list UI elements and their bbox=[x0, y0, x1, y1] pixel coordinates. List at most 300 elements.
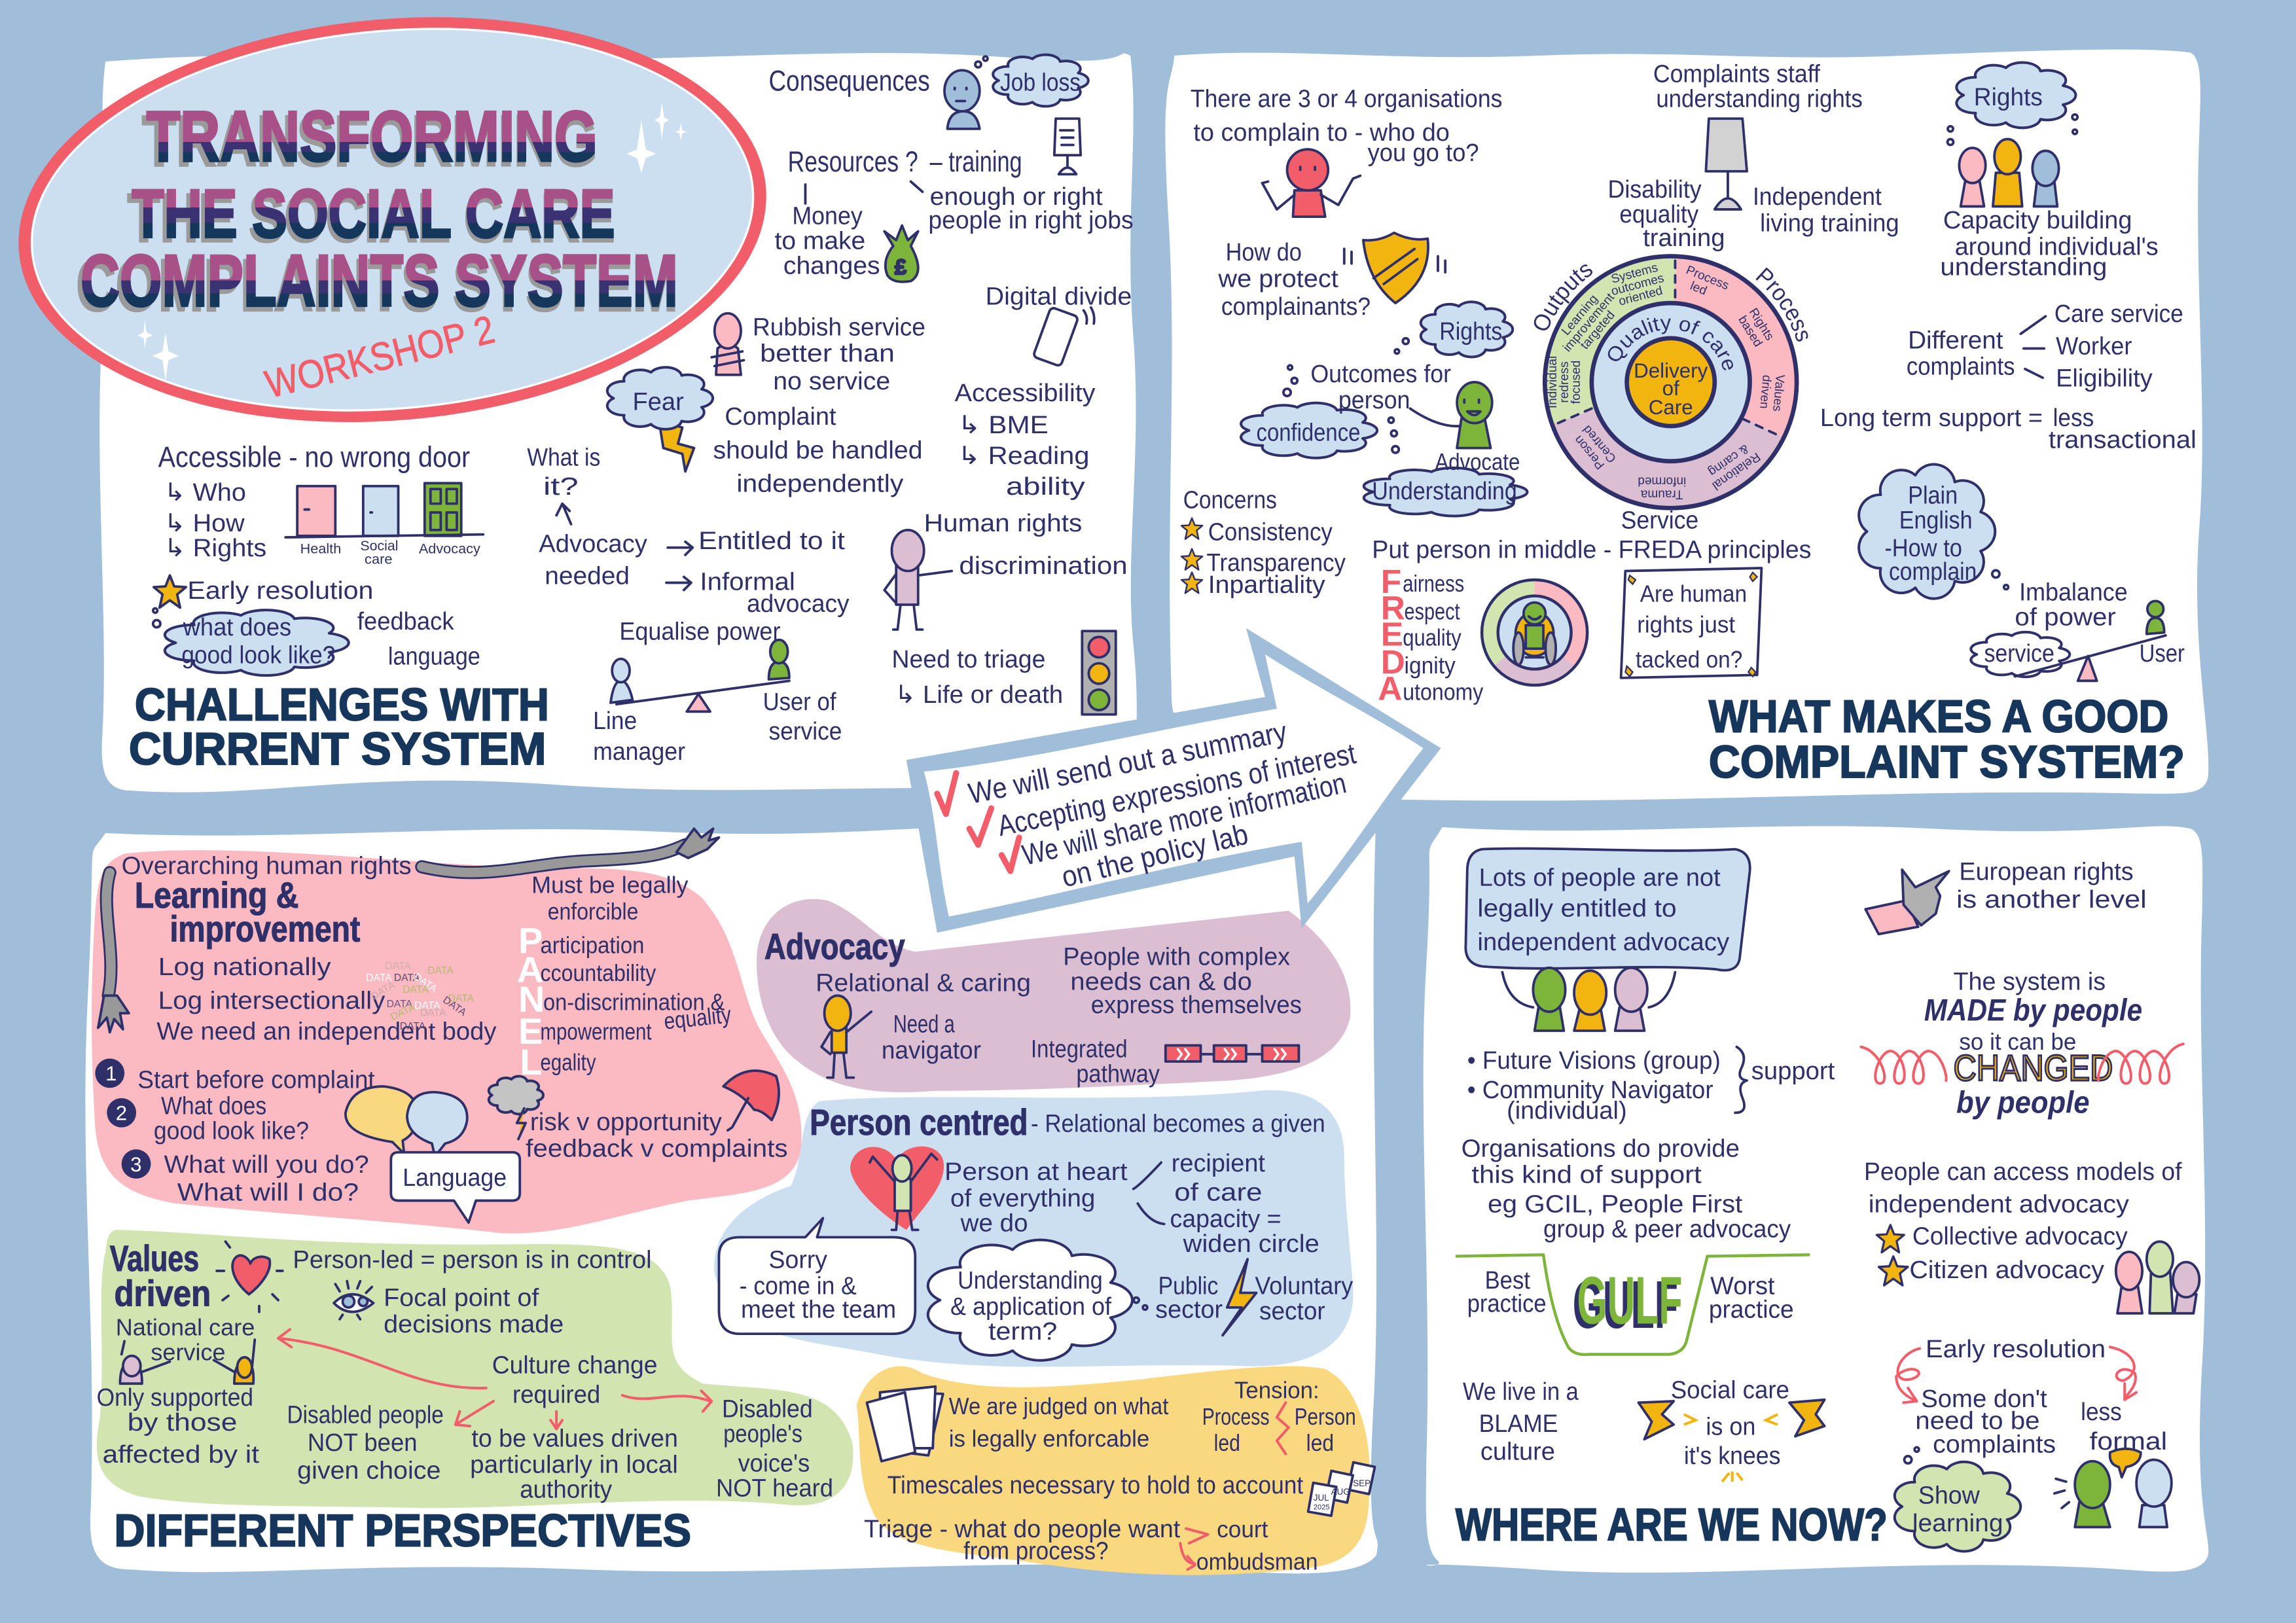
thought cloud: job loss: Job loss bbox=[1000, 69, 1081, 97]
blob: learning and improvement (pink): Overarching human rights bbox=[122, 853, 412, 880]
fear cloud with lightning bbox=[607, 367, 713, 471]
panel: what makes a good complaint system bbox=[1165, 50, 2208, 800]
blob: values driven (green): Disabled bbox=[722, 1396, 813, 1423]
icon: phone bbox=[1033, 307, 1094, 366]
icon: navigator person bbox=[821, 995, 871, 1078]
blob: values driven (green): service bbox=[151, 1339, 226, 1365]
gulf diagram bbox=[1456, 1255, 1810, 1355]
accessible no wrong door: ↳ Rights bbox=[164, 535, 266, 562]
note: are human rights just tacked on: Are human bbox=[1640, 581, 1747, 607]
blob: legally enforceable (yellow): led bbox=[1306, 1430, 1334, 1456]
blob: advocacy (purple) bbox=[757, 899, 1350, 1092]
heading: challenges bbox=[129, 679, 549, 774]
blob: person centred (blue): Person at heart bbox=[944, 1158, 1128, 1186]
advocacy needed flow bbox=[527, 444, 850, 618]
quality of care wheel: Centred bbox=[1580, 422, 1619, 465]
blob: values driven (green): affected by it bbox=[103, 1441, 259, 1469]
early resolution bbox=[153, 575, 480, 675]
cloud: confidence: confidence bbox=[1257, 419, 1360, 446]
blob: legally enforceable (yellow): ombudsman bbox=[1196, 1548, 1318, 1575]
PANEL principles: A bbox=[517, 949, 543, 990]
blob: advocacy (purple): People with complex bbox=[1063, 943, 1290, 971]
resources block bbox=[775, 145, 1134, 279]
blob: learning and improvement (pink): Must be legally bbox=[531, 872, 689, 899]
support list: Organisations do provide bbox=[1462, 1135, 1740, 1162]
complaints staff and lamp: Complaints staff bbox=[1653, 60, 1820, 88]
cloud: plain english: English bbox=[1899, 507, 1973, 535]
speech bubble: sorry bbox=[719, 1218, 915, 1334]
early resolution loop: less bbox=[2081, 1399, 2122, 1426]
concerns list: Concerns bbox=[1183, 486, 1277, 514]
speech bubble: sorry: meet the team bbox=[741, 1296, 896, 1324]
quality of care wheel: outcomes bbox=[1610, 272, 1666, 298]
icon: lamp bbox=[1706, 118, 1747, 209]
capacity building group: around individual's bbox=[1955, 233, 2159, 260]
cloud: understanding bbox=[1364, 468, 1527, 516]
quality of care wheel: Systems bbox=[1610, 261, 1659, 287]
numbered questions: What will I do? bbox=[177, 1179, 359, 1207]
blob: person centred (blue): - Relational becomes a given bbox=[1031, 1110, 1325, 1137]
icon: two small people bbox=[120, 1340, 255, 1383]
icon: talking people bbox=[2054, 1449, 2172, 1527]
icon: advocate person bbox=[1410, 382, 1492, 448]
FREDA principles: utonomy bbox=[1403, 679, 1483, 705]
icon: calendar pages bbox=[1308, 1462, 1375, 1516]
quality of care wheel: oriented bbox=[1617, 284, 1664, 309]
quality of care wheel: Relational bbox=[1710, 450, 1763, 492]
equalise power see-saw: Equalise power bbox=[619, 618, 781, 646]
cloud: show learning bbox=[1895, 1462, 2020, 1552]
support list: support bbox=[1751, 1058, 1835, 1085]
public and voluntary sector: sector bbox=[1259, 1298, 1325, 1325]
PANEL principles: egality bbox=[541, 1049, 596, 1075]
red arrows from culture change bbox=[278, 1329, 711, 1429]
blob: values driven (green): Disabled people bbox=[287, 1402, 444, 1429]
cloud: plain english: complain bbox=[1889, 558, 1977, 586]
different complaints: Care service bbox=[2054, 300, 2183, 328]
icon: calendar pages: JUL bbox=[1314, 1493, 1329, 1503]
cloud: understanding and application of term: term? bbox=[988, 1318, 1057, 1346]
models of advocacy bbox=[1864, 1158, 2199, 1313]
cloud: what does good look like: good look like? bbox=[181, 641, 335, 669]
PANEL principles: on-discrimination & bbox=[543, 990, 725, 1016]
PANEL principles: N bbox=[518, 978, 545, 1020]
fear cloud with lightning: Fear bbox=[632, 388, 684, 416]
advocacy needed flow: it? bbox=[543, 473, 579, 501]
cloud: plain english: Plain bbox=[1908, 482, 1958, 510]
support list: • Community Navigator bbox=[1467, 1077, 1713, 1104]
data word cloud: DATA bbox=[414, 1000, 440, 1011]
social care on its knees: Social care bbox=[1671, 1377, 1789, 1404]
protect complainants: How do bbox=[1226, 239, 1302, 266]
blob: person centred (blue): widen circle bbox=[1183, 1230, 1319, 1258]
traffic light triage: ↳ Life or death bbox=[895, 681, 1063, 709]
quality of care wheel: Trauma bbox=[1640, 487, 1683, 501]
accessible no wrong door: ↳ Who bbox=[164, 479, 246, 507]
gulf diagram: practice bbox=[1467, 1291, 1547, 1318]
rubbish service: better than bbox=[760, 340, 895, 368]
thought cloud: job loss bbox=[975, 55, 1088, 107]
support list bbox=[1462, 1047, 1835, 1243]
imbalance of power see-saw: Imbalance bbox=[2019, 579, 2128, 606]
early resolution loop bbox=[1895, 1336, 2172, 1552]
protect complainants: we protect bbox=[1217, 266, 1338, 293]
main title: COMPLAINTS SYSTEM bbox=[81, 240, 678, 322]
cloud: understanding and application of term: & application of bbox=[950, 1293, 1111, 1321]
quality of care wheel: Delivery bbox=[1634, 359, 1708, 382]
cloud: what does good look like bbox=[153, 609, 349, 675]
numbered questions: 3 bbox=[130, 1153, 142, 1176]
blob: advocacy (purple): Need a bbox=[893, 1010, 955, 1038]
data word cloud: DATA bbox=[420, 1008, 446, 1019]
risk and feedback with storm and umbrella: risk v opportunity bbox=[530, 1109, 722, 1136]
resources block: Resources ? bbox=[788, 145, 918, 178]
different complaints: complaints bbox=[1907, 353, 2015, 381]
blob: learning and improvement (pink): Log nationally bbox=[158, 954, 331, 981]
made by people: CHANGED bbox=[1953, 1047, 2113, 1088]
public and voluntary sector: sector bbox=[1155, 1296, 1223, 1324]
FREDA principles: espect bbox=[1405, 598, 1460, 624]
imbalance of power see-saw: of power bbox=[2015, 603, 2116, 631]
FREDA principles: D bbox=[1381, 643, 1405, 681]
quality of care wheel: Individual bbox=[1546, 356, 1560, 408]
blob: values driven (green): Values bbox=[110, 1238, 199, 1279]
icon: cross-armed person bbox=[711, 313, 744, 375]
quality of care wheel: Outputs bbox=[1534, 264, 1592, 330]
blob: person centred (blue) bbox=[714, 1090, 1353, 1367]
outcomes for person: person bbox=[1338, 387, 1410, 414]
language speech bubble: Language bbox=[403, 1164, 507, 1192]
panel: where are we now bbox=[1424, 826, 2208, 1573]
quality of care wheel: Process bbox=[1684, 263, 1731, 293]
quality of care wheel: Quality of care bbox=[1607, 318, 1733, 370]
icon: pointing hand bbox=[1865, 870, 1949, 934]
imbalance of power see-saw: User bbox=[2140, 640, 2185, 668]
blob: values driven (green): NOT heard bbox=[716, 1474, 833, 1502]
cloud: plain english bbox=[1859, 465, 2008, 599]
heading: what makes a good complaint system bbox=[1709, 691, 2185, 787]
numbered questions bbox=[95, 1059, 375, 1207]
workshop label: WORKSHOP 2 bbox=[260, 307, 499, 406]
blob: values driven (green): voice's bbox=[738, 1450, 810, 1477]
organisations question: There are 3 or 4 organisations bbox=[1191, 85, 1502, 113]
complaints staff and lamp: understanding rights bbox=[1656, 85, 1863, 113]
FREDA principles: F bbox=[1381, 562, 1401, 600]
numbered questions: 2 bbox=[116, 1101, 127, 1124]
icon: calendar pages: 2025 bbox=[1314, 1504, 1330, 1512]
quality of care wheel: Service bbox=[1621, 507, 1698, 535]
quality of care wheel: Values bbox=[1770, 374, 1787, 412]
blob: learning and improvement (pink): Learning & bbox=[135, 874, 298, 916]
blob: advocacy (purple): navigator bbox=[882, 1037, 981, 1065]
icon: calendar pages: AUG bbox=[1331, 1487, 1350, 1497]
gulf diagram: practice bbox=[1709, 1296, 1794, 1324]
blob: advocacy (purple): express themselves bbox=[1091, 991, 1302, 1019]
protect complainants bbox=[1217, 233, 1445, 321]
icon: three doors bbox=[285, 483, 483, 537]
icon: shrugging person bbox=[1263, 149, 1360, 217]
resources block: people in right jobs bbox=[928, 207, 1134, 234]
early resolution loop: formal bbox=[2090, 1428, 2167, 1455]
blame culture: culture bbox=[1480, 1438, 1555, 1466]
blob: values driven (green): Culture change bbox=[492, 1352, 658, 1380]
heading: what makes a good complaint system: COMPLAINT SYSTEM? bbox=[1709, 736, 2185, 787]
PANEL principles: equality bbox=[662, 1001, 732, 1035]
blob: advocacy (purple): Advocacy bbox=[764, 925, 905, 967]
data word cloud: DATA bbox=[403, 984, 429, 995]
title ellipse bbox=[1, 0, 783, 452]
human rights person bbox=[884, 510, 1128, 630]
rubbish service: Rubbish service bbox=[753, 313, 925, 341]
accessible no wrong door: Social bbox=[360, 538, 399, 554]
icon: grey arms bbox=[98, 829, 719, 1032]
cloud: understanding and application of term: Understanding bbox=[958, 1267, 1103, 1294]
blob: person centred (blue): of care bbox=[1174, 1179, 1263, 1207]
gulf diagram: GULF bbox=[1577, 1262, 1683, 1338]
blob: advocacy (purple): Integrated bbox=[1031, 1035, 1128, 1063]
social care on its knees: is on bbox=[1706, 1414, 1755, 1441]
blob: person centred (blue): capacity = bbox=[1170, 1205, 1282, 1233]
long term support: less bbox=[2053, 404, 2094, 432]
resources block: changes bbox=[783, 252, 880, 279]
gulf diagram: Best bbox=[1485, 1267, 1530, 1294]
cloud: understanding and application of term bbox=[928, 1240, 1147, 1361]
blob: values driven (green): authority bbox=[520, 1476, 612, 1504]
digital divide bbox=[986, 283, 1132, 366]
accessible no wrong door: Advocacy bbox=[419, 541, 480, 557]
arrow callout: next steps: on the policy lab bbox=[1058, 817, 1251, 894]
human rights person: Human rights bbox=[924, 510, 1082, 537]
made by people bbox=[1861, 968, 2183, 1119]
early resolution loop: complaints bbox=[1933, 1431, 2056, 1458]
social care on its knees: it's knees bbox=[1684, 1442, 1780, 1470]
data word cloud: DATA bbox=[385, 961, 411, 972]
quality of care wheel: Person bbox=[1571, 433, 1607, 472]
blob: learning and improvement (pink): enforcible bbox=[548, 899, 638, 925]
main title: TRANSFORMING bbox=[147, 97, 598, 177]
numbered questions: What will you do? bbox=[164, 1151, 369, 1179]
blame culture: BLAME bbox=[1479, 1410, 1558, 1438]
blob: values driven (green): Only supported bbox=[97, 1384, 253, 1412]
equalise power see-saw: manager bbox=[593, 738, 685, 766]
outcomes for person: Advocate bbox=[1435, 449, 1520, 475]
sparkles bbox=[137, 103, 687, 381]
main title: THE SOCIAL CARE bbox=[128, 180, 615, 257]
data word cloud: DATA bbox=[412, 971, 439, 995]
blob: values driven (green): National care bbox=[116, 1314, 255, 1340]
outcomes for person bbox=[1241, 302, 1527, 516]
blob: legally enforceable (yellow): from process? bbox=[963, 1538, 1109, 1565]
blob: legally enforceable (yellow): led bbox=[1214, 1430, 1240, 1456]
lots of people box bbox=[1465, 849, 1750, 1031]
concerns list: Transparency bbox=[1206, 550, 1346, 577]
data word cloud: DATA bbox=[440, 995, 469, 1018]
blob: person centred (blue): of everything bbox=[950, 1185, 1095, 1212]
lots of people box: Lots of people are not bbox=[1479, 865, 1721, 892]
numbered questions: good look like? bbox=[154, 1118, 309, 1145]
blob: learning and improvement (pink): Log intersectionally bbox=[158, 987, 385, 1014]
blob: advocacy (purple): Relational & caring bbox=[816, 970, 1031, 997]
icon: heart bbox=[217, 1241, 283, 1312]
concerns list bbox=[1181, 486, 1346, 599]
resources block: to make bbox=[775, 227, 865, 255]
concerns list: Inpartiality bbox=[1208, 571, 1325, 599]
quality of care wheel: focused bbox=[1570, 361, 1583, 404]
quality of care wheel bbox=[1534, 254, 1808, 535]
complaint handling: Complaint bbox=[725, 403, 836, 431]
heading: what makes a good complaint system: WHAT MAKES A GOOD bbox=[1709, 691, 2168, 742]
cloud: rights: Rights bbox=[1439, 318, 1502, 346]
note: are human rights just tacked on bbox=[1621, 568, 1761, 678]
consequences block bbox=[769, 55, 1088, 129]
blob: values driven (green): decisions made bbox=[384, 1311, 564, 1338]
icon: person at heart bbox=[850, 1147, 944, 1230]
complaints staff and lamp bbox=[1607, 60, 1899, 252]
quality of care wheel: Rights bbox=[1746, 306, 1776, 343]
data word cloud: DATA bbox=[387, 999, 413, 1010]
numbered questions: Start before complaint bbox=[137, 1066, 375, 1094]
cloud: show learning: learning bbox=[1912, 1510, 2003, 1537]
consequences block: Consequences bbox=[769, 65, 930, 98]
accessibility: Accessibility bbox=[955, 380, 1095, 407]
blob: values driven (green): Person-led = person is in control bbox=[293, 1246, 652, 1274]
advocacy needed flow: needed bbox=[545, 563, 630, 590]
accessible no wrong door: Health bbox=[300, 541, 341, 557]
accessibility: ability bbox=[1006, 473, 1085, 501]
note: are human rights just tacked on: rights just bbox=[1637, 611, 1735, 637]
cloud: show learning: Show bbox=[1918, 1482, 1980, 1510]
panel: different perspectives bbox=[85, 804, 1378, 1573]
cloud: confidence bbox=[1241, 403, 1377, 458]
advocacy needed flow: Entitled to it bbox=[698, 527, 845, 555]
main title bbox=[76, 97, 678, 326]
support list: group & peer advocacy bbox=[1543, 1215, 1791, 1243]
FREDA principles: R bbox=[1381, 588, 1405, 626]
quality of care wheel: of bbox=[1662, 377, 1679, 400]
data word cloud: DATA bbox=[394, 972, 420, 984]
different complaints: Eligibility bbox=[2056, 365, 2153, 393]
icon: worried person bbox=[944, 70, 980, 129]
data word cloud: DATA bbox=[400, 1021, 426, 1032]
PANEL principles: P bbox=[518, 919, 543, 961]
icon: stack of paper bbox=[867, 1387, 943, 1461]
icon: money bag: £ bbox=[895, 255, 906, 278]
made by people: MADE by people bbox=[1924, 992, 2142, 1027]
rubbish service: no service bbox=[773, 368, 890, 395]
quality of care wheel: improvement bbox=[1560, 291, 1617, 355]
complaints staff and lamp: Independent bbox=[1753, 183, 1882, 211]
cloud: what does good look like: what does bbox=[183, 614, 291, 641]
concerns list: Consistency bbox=[1208, 519, 1333, 546]
public and voluntary sector bbox=[1155, 1259, 1353, 1335]
quality of care wheel: Learning bbox=[1559, 293, 1601, 338]
blob: values driven (green): by those bbox=[128, 1409, 237, 1436]
resources block: Money bbox=[792, 202, 863, 230]
models of advocacy: independent advocacy bbox=[1869, 1190, 2129, 1218]
arrow callout: next steps: We will send out a summary bbox=[966, 715, 1290, 810]
main title: TRANSFORMING bbox=[142, 101, 598, 181]
european rights: is another level bbox=[1956, 886, 2147, 914]
rubbish service bbox=[711, 313, 925, 395]
blob: legally enforceable (yellow): Timescales necessary to hold to account bbox=[888, 1472, 1304, 1499]
blob: values driven (green): required bbox=[512, 1381, 600, 1408]
heading: challenges: CURRENT SYSTEM bbox=[129, 723, 546, 774]
PANEL principles: E bbox=[518, 1010, 543, 1052]
icon: bulletin lamp bbox=[1054, 118, 1081, 174]
blob: values driven (green): driven bbox=[115, 1273, 211, 1314]
lots of people box: independent advocacy bbox=[1477, 929, 1729, 956]
long term support: transactional bbox=[2049, 427, 2197, 454]
blob: legally enforceable (yellow): Person bbox=[1295, 1404, 1356, 1430]
blob: values driven (green): particularly in local bbox=[470, 1452, 678, 1479]
capacity building group bbox=[1940, 62, 2159, 281]
organisations question bbox=[1191, 85, 1502, 217]
models of advocacy: Collective advocacy bbox=[1912, 1223, 2128, 1251]
speech bubble: sorry: - come in & bbox=[740, 1273, 857, 1300]
blob: legally enforceable (yellow): is legally enforcable bbox=[949, 1425, 1149, 1452]
early resolution loop: Some don't bbox=[1921, 1385, 2047, 1413]
gulf diagram: Worst bbox=[1710, 1273, 1775, 1300]
lots of people box: legally entitled to bbox=[1477, 895, 1677, 923]
language speech bubble bbox=[391, 1152, 520, 1222]
heading: challenges: CHALLENGES WITH bbox=[135, 679, 549, 730]
blob: learning and improvement (pink): improvement bbox=[170, 908, 360, 950]
data word cloud: DATA bbox=[366, 972, 392, 984]
data word cloud: DATA bbox=[389, 1002, 418, 1023]
different complaints: Worker bbox=[2056, 332, 2132, 360]
icon: pointing person bbox=[884, 530, 952, 630]
data word cloud: DATA bbox=[369, 980, 397, 1003]
accessible no wrong door: Accessible - no wrong door bbox=[158, 441, 470, 474]
blob: values driven (green): to be values driven bbox=[471, 1425, 678, 1452]
accessibility: ↳ Reading bbox=[958, 442, 1090, 470]
FREDA principles bbox=[1372, 536, 1811, 707]
human rights person: discrimination bbox=[959, 552, 1128, 580]
complaints staff and lamp: equality bbox=[1619, 201, 1698, 228]
arrow callout: next steps: Accepting expressions of interest bbox=[995, 737, 1359, 842]
arrow callout: next steps bbox=[906, 628, 1441, 933]
organisations question: to complain to - who do bbox=[1193, 119, 1450, 147]
quality of care wheel: informed bbox=[1638, 474, 1686, 488]
heading: different perspectives: DIFFERENT PERSPECTIVES bbox=[115, 1505, 691, 1556]
cloud: plain english: -How to bbox=[1884, 535, 1962, 562]
capacity building group: understanding bbox=[1940, 254, 2107, 281]
blob: advocacy (purple): pathway bbox=[1076, 1060, 1160, 1088]
blob: legally enforceable (yellow): Triage - what do people want bbox=[864, 1516, 1181, 1543]
blob: person centred (blue): Person centred bbox=[810, 1101, 1028, 1143]
accessibility bbox=[955, 380, 1095, 501]
quality of care wheel: led bbox=[1688, 279, 1709, 298]
equalise power see-saw bbox=[593, 618, 842, 766]
data word cloud bbox=[366, 961, 475, 1032]
red squiggles bbox=[1861, 1044, 2183, 1084]
advocacy needed flow: Informal bbox=[700, 569, 795, 596]
FREDA principles: A bbox=[1378, 669, 1402, 707]
made by people: so it can be bbox=[1959, 1029, 2076, 1055]
FREDA principles: E bbox=[1381, 615, 1403, 653]
icon: three people bbox=[1959, 139, 2059, 206]
resources block: enough or right bbox=[930, 183, 1103, 211]
icon: integrated pathway bbox=[1166, 1045, 1299, 1061]
PANEL principles bbox=[517, 919, 732, 1082]
accessible no wrong door bbox=[158, 441, 483, 567]
gulf diagram: GULF bbox=[1573, 1267, 1678, 1342]
advocacy needed flow: What is bbox=[527, 444, 600, 471]
blob: legally enforceable (yellow): We are judged on what bbox=[949, 1393, 1168, 1419]
blob: person centred (blue): recipient bbox=[1172, 1150, 1265, 1177]
blob: values driven (green): given choice bbox=[297, 1457, 440, 1485]
blob: values driven (green): people's bbox=[723, 1421, 802, 1448]
